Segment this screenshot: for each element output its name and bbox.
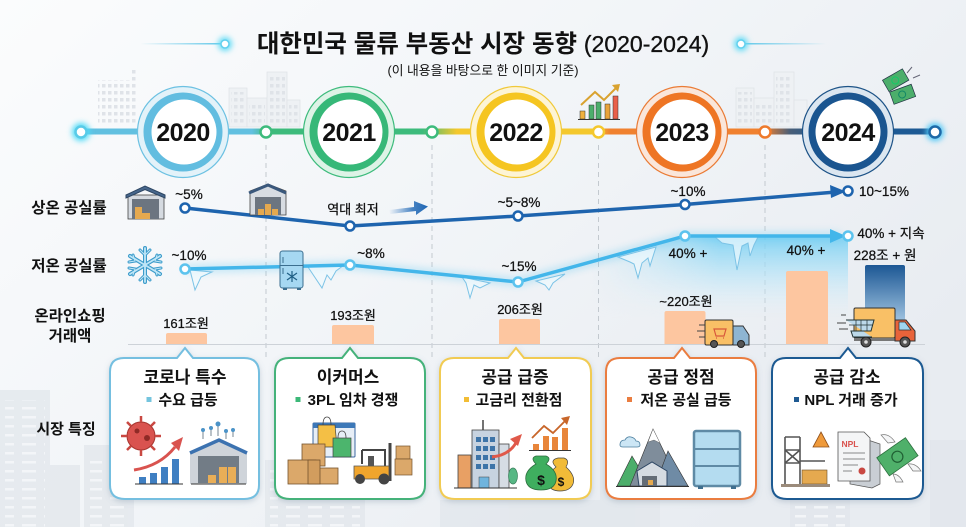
chart: online shopping bars: 161조원 (163, 316, 209, 331)
panel: 2023 공급 정점 (606, 348, 756, 499)
timeline nodes (72, 123, 944, 141)
area under cold line (609, 238, 848, 303)
dashed dividers (266, 145, 765, 357)
icon: money bags (526, 456, 574, 491)
icon: mountain warehouse (616, 429, 689, 486)
year badge 2023: 2023 (655, 119, 709, 147)
year badge 2020 (138, 86, 228, 178)
arrow: record low (389, 201, 428, 215)
year badge 2021: 2021 (322, 119, 376, 147)
chart: online shopping bars: 40% + (787, 243, 825, 258)
icon: money (882, 67, 920, 104)
panel: 2022 공급 급증 (440, 348, 591, 499)
title: 대한민국 물류 부동산 시장 동향 (2020-2024) (257, 30, 709, 58)
chart: online shopping bars: 228조 + 원 (854, 248, 916, 263)
panel: 2020 코로나 특수: 수요 급등 (158, 392, 218, 409)
panel: 2024 공급 감소 (772, 348, 923, 499)
row label: 온라인쇼핑 거래액: 거래액 (49, 327, 91, 345)
chart: ambient vacancy line: ~10% (671, 184, 705, 199)
icon: empty cold storage shelf (694, 431, 740, 489)
icon: orange chart (529, 416, 571, 450)
icon: money bags: $ (558, 475, 565, 489)
chart: online shopping bars: 206조원 (497, 302, 543, 317)
year badge 2022 (470, 86, 562, 178)
panel: 2021 이커머스: 3PL 임차 경쟁 (308, 392, 398, 409)
icon: snowflake (129, 248, 161, 282)
chart: cold vacancy line: ~8% (357, 246, 385, 261)
row label: 저온 공실률: 저온 공실률 (31, 257, 107, 275)
chart: online shopping bars: ~220조원 (659, 294, 713, 309)
year badge 2024: 2024 (821, 119, 875, 147)
panel: 2022 공급 급증: 고금리 전환점 (476, 392, 562, 409)
year badge 2022: 2022 (489, 119, 543, 147)
icon: NPL document: NPL (842, 439, 858, 449)
chart: ambient vacancy line: ~5% (175, 187, 203, 202)
icon: small delivery truck (697, 320, 749, 348)
icon: large shopping truck (837, 308, 915, 347)
title decoration left (140, 37, 232, 51)
panel: 2020 코로나 특수 (110, 348, 259, 499)
icon: boxes and shopping bags (288, 417, 355, 484)
chart: ambient vacancy line: 10~15% (859, 184, 909, 199)
chart: online shopping bars (128, 243, 925, 345)
chart: cold vacancy line: ~10% (172, 248, 206, 263)
icon: smart warehouse (190, 422, 247, 484)
icon: stalled construction (781, 432, 830, 487)
chart: cold vacancy line (172, 226, 925, 298)
panel: 2024 공급 감소: NPL 거래 증가 (804, 392, 898, 409)
year badge 2024 (802, 86, 894, 178)
icon: office building (454, 420, 522, 488)
timeline axis (81, 128, 935, 134)
panel: 2021 이커머스: 이커머스 (317, 368, 379, 387)
chart: cold vacancy line: ~15% (502, 259, 536, 274)
title decoration right (734, 37, 826, 51)
row label: 온라인쇼핑 거래액 (34, 307, 106, 345)
row label: 온라인쇼핑 거래액: 온라인쇼핑 (34, 307, 106, 325)
chart: ambient vacancy line: ~5~8% (498, 195, 540, 210)
chart: ambient vacancy line (175, 184, 909, 230)
year badge 2021 (304, 86, 394, 178)
icon: money bags: $ (537, 472, 545, 488)
row label: 상온 공실률: 상온 공실률 (31, 199, 107, 217)
subtitle: (이 내용을 바탕으로 한 이미지 기준) (387, 63, 579, 78)
panel: 2021 이커머스 (275, 348, 425, 499)
icon: warehouse 1 (126, 186, 165, 219)
year badge 2023 (636, 86, 728, 178)
panel: 2024 공급 감소: 공급 감소 (813, 368, 881, 387)
panel: 2023 공급 정점: 공급 정점 (647, 368, 715, 387)
row label: 시장 특징: 시장 특징 (36, 421, 96, 438)
chart: online shopping bars: 193조원 (330, 308, 376, 323)
chart: cold vacancy line: 40% + 지속 (857, 226, 925, 241)
year badge 2020: 2020 (156, 119, 210, 147)
icon: virus and rising chart (121, 416, 183, 484)
panel: 2023 공급 정점: 저온 공실 급등 (640, 392, 732, 409)
icon: NPL document (838, 432, 880, 488)
icon: growth chart (578, 84, 620, 120)
chart: ambient vacancy line: 역대 최저 (327, 202, 379, 217)
icon: flying money (877, 435, 921, 482)
icon: warehouse 2 (249, 184, 286, 215)
panel: 2020 코로나 특수: 코로나 특수 (144, 368, 226, 387)
panel: 2022 공급 급증: 공급 급증 (481, 368, 549, 387)
chart: cold vacancy line: 40% + (669, 246, 707, 261)
icon: forklift (354, 443, 412, 484)
icon: refrigerator (280, 251, 303, 290)
